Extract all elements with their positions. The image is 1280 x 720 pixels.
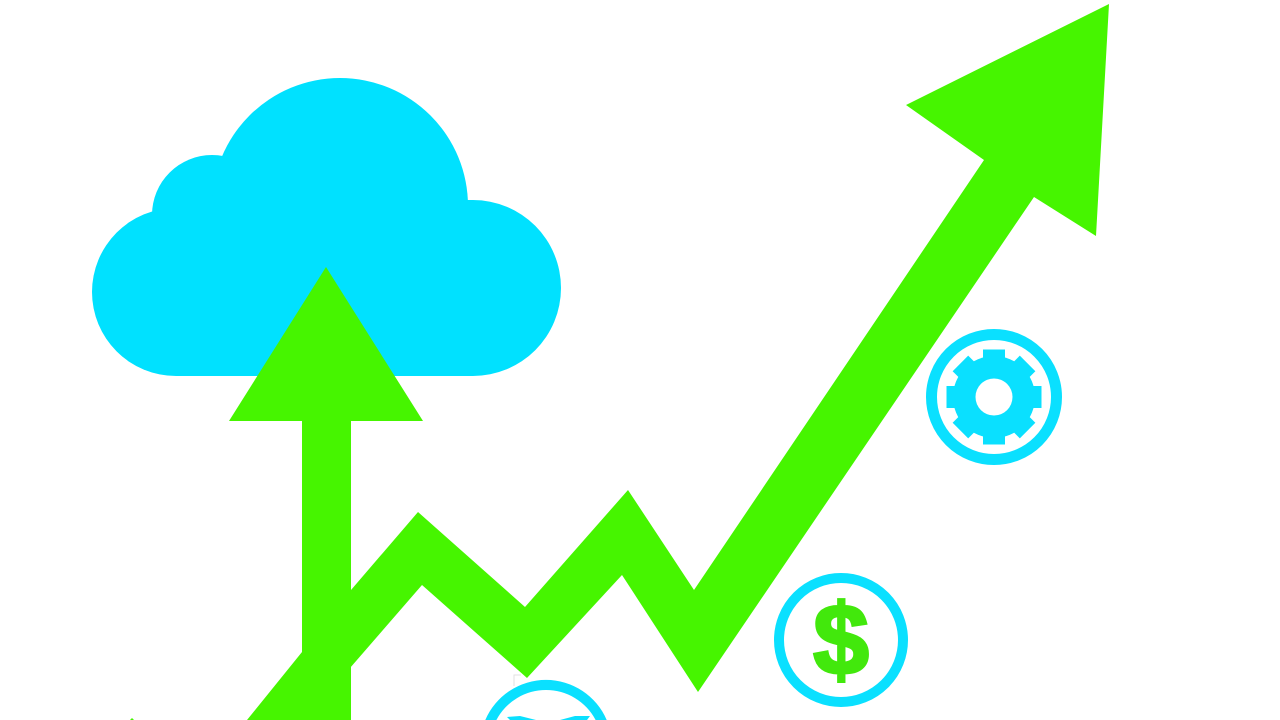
icon: dollar coin xyxy=(779,578,903,702)
small green fragment at bottom edge xyxy=(130,718,134,720)
icon: gear in circle xyxy=(932,334,1056,460)
dollar sign: $ xyxy=(813,584,869,696)
icon: partially visible circle badge xyxy=(485,680,607,720)
small grey artefact beside the badge xyxy=(514,675,521,686)
arrow: rising zigzag growth arrow xyxy=(247,4,1109,720)
arrow: vertical up arrow xyxy=(229,267,423,720)
icon: cloud xyxy=(92,78,561,376)
